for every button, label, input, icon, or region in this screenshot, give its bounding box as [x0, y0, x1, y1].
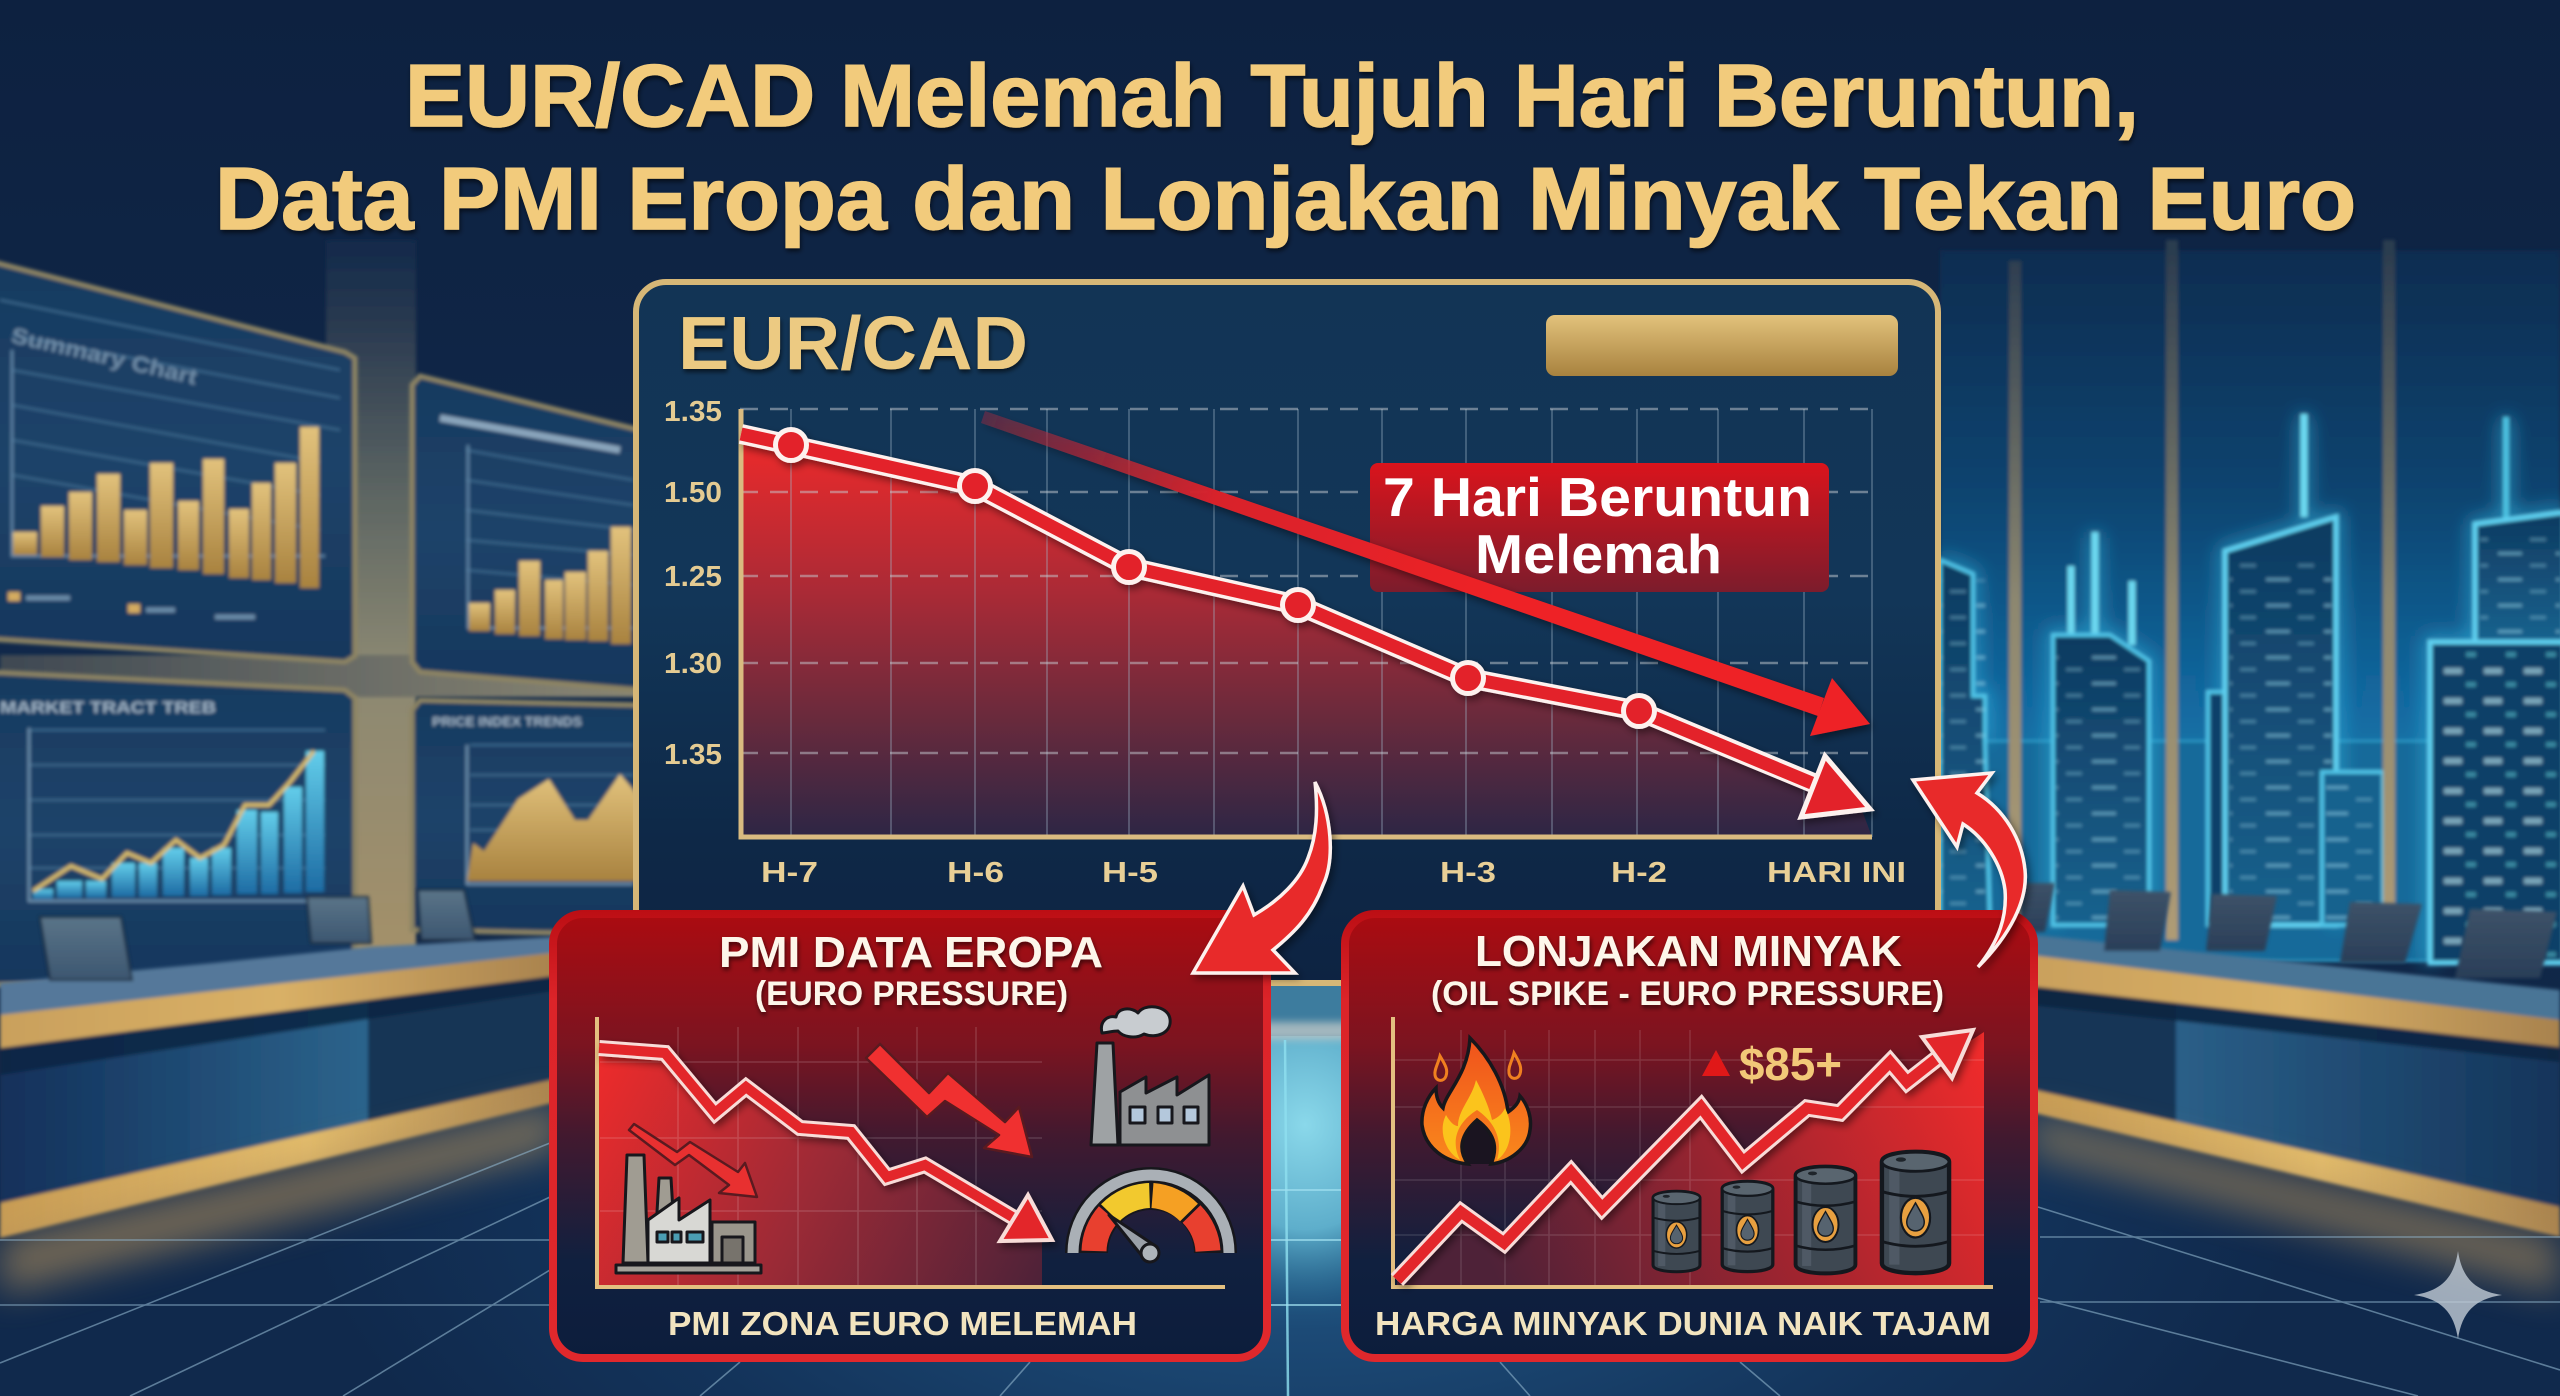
building: left behind panel — [1940, 560, 1990, 925]
icon: small factory — [616, 1155, 761, 1273]
x axis labels: H-7 — [761, 857, 818, 889]
card subheading: (OIL SPIKE - EURO PRESSURE) — [1431, 975, 1944, 1013]
arrow: oil card to chart — [1913, 773, 2025, 967]
callout: 7 Hari Beruntun Melemah: Melemah — [1475, 523, 1722, 585]
screen: market trend chart: MARKET TRACT TREB — [0, 698, 216, 717]
icon: big down arrow — [866, 1044, 1032, 1157]
y axis labels: 1.35 — [664, 739, 722, 771]
wall screens — [0, 261, 640, 985]
pmi grid — [600, 1027, 1042, 1286]
oil rising line — [1397, 1030, 1973, 1280]
card caption: PMI ZONA EURO MELEMAH — [668, 1305, 1137, 1342]
building: center left tower — [2053, 532, 2149, 925]
y axis labels: 1.50 — [664, 477, 722, 509]
building: right towers — [2430, 417, 2560, 963]
price tag: $85+: $85+ — [1739, 1038, 1842, 1090]
price line with markers — [741, 430, 1870, 817]
chart grid — [740, 409, 1872, 837]
y axis labels: 1.25 — [664, 561, 722, 593]
pmi falling line — [599, 1048, 1052, 1241]
pmi axes — [597, 1017, 1225, 1287]
watermark star — [2414, 1251, 2502, 1339]
x axis labels: H-3 — [1440, 857, 1496, 889]
card subheading: (EURO PRESSURE) — [755, 975, 1068, 1013]
axes — [741, 409, 1872, 837]
screen: summary bar chart: Summary Chart — [9, 323, 200, 390]
title — [215, 46, 2356, 248]
x axis labels: HARI INI — [1767, 857, 1906, 889]
screen: gold area chart — [412, 700, 640, 935]
x axis labels: H-2 — [1611, 857, 1667, 889]
panel: PMI data card — [553, 914, 1267, 1358]
card heading: LONJAKAN MINYAK — [1475, 927, 1902, 976]
pmi area — [599, 1048, 1042, 1286]
card caption: HARGA MINYAK DUNIA NAIK TAJAM — [1375, 1305, 1991, 1342]
oil grid — [1395, 1030, 1984, 1285]
skyline outer glow — [1940, 414, 2560, 963]
arrow: chart to PMI card — [1193, 782, 1330, 973]
oil axes — [1393, 1017, 1993, 1287]
oil area — [1397, 1032, 1984, 1285]
x axis labels: H-5 — [1102, 857, 1158, 889]
x axis labels: H-6 — [947, 857, 1004, 889]
left conference table — [0, 890, 640, 1238]
right conference table — [1940, 883, 2560, 1237]
gold bar — [1546, 315, 1898, 376]
screen: bar chart right — [412, 376, 640, 690]
arrow: long downtrend — [981, 411, 1870, 736]
floor with tile lines and reflections — [0, 986, 2560, 1396]
city window with skyline — [1940, 240, 2560, 963]
building: tall center tower — [2208, 414, 2383, 925]
window mullions — [2009, 240, 2395, 951]
title: EUR/CAD Melemah Tujuh Hari Beruntun, — [405, 46, 2139, 145]
icon: small down arrow — [629, 1124, 757, 1197]
panel: oil spike card — [1345, 914, 2034, 1358]
screen: market trend chart — [0, 672, 355, 985]
callout: 7 Hari Beruntun Melemah — [1370, 463, 1829, 592]
heading: EUR/CAD: EUR/CAD — [678, 301, 1028, 385]
icon: oil barrels — [1652, 1152, 1951, 1273]
y axis labels: 1.35 — [664, 396, 722, 428]
callout: 7 Hari Beruntun Melemah: 7 Hari Beruntun — [1383, 466, 1812, 528]
y axis labels — [664, 396, 722, 771]
icon: flame — [1422, 1038, 1531, 1164]
screen: gold area chart: PRICE INDEX TRENDS — [432, 714, 582, 729]
screen: summary bar chart — [0, 261, 355, 662]
panel: EUR/CAD main chart — [636, 282, 1938, 983]
icon: gauge — [1073, 1175, 1229, 1262]
area under price line — [740, 426, 1872, 837]
y axis labels: 1.30 — [664, 648, 722, 680]
x axis labels — [761, 857, 1906, 889]
card heading: PMI DATA EROPA — [719, 928, 1103, 977]
icon: large factory with smoke — [1091, 1007, 1209, 1145]
title: Data PMI Eropa dan Lonjakan Minyak Tekan Euro — [215, 149, 2356, 248]
